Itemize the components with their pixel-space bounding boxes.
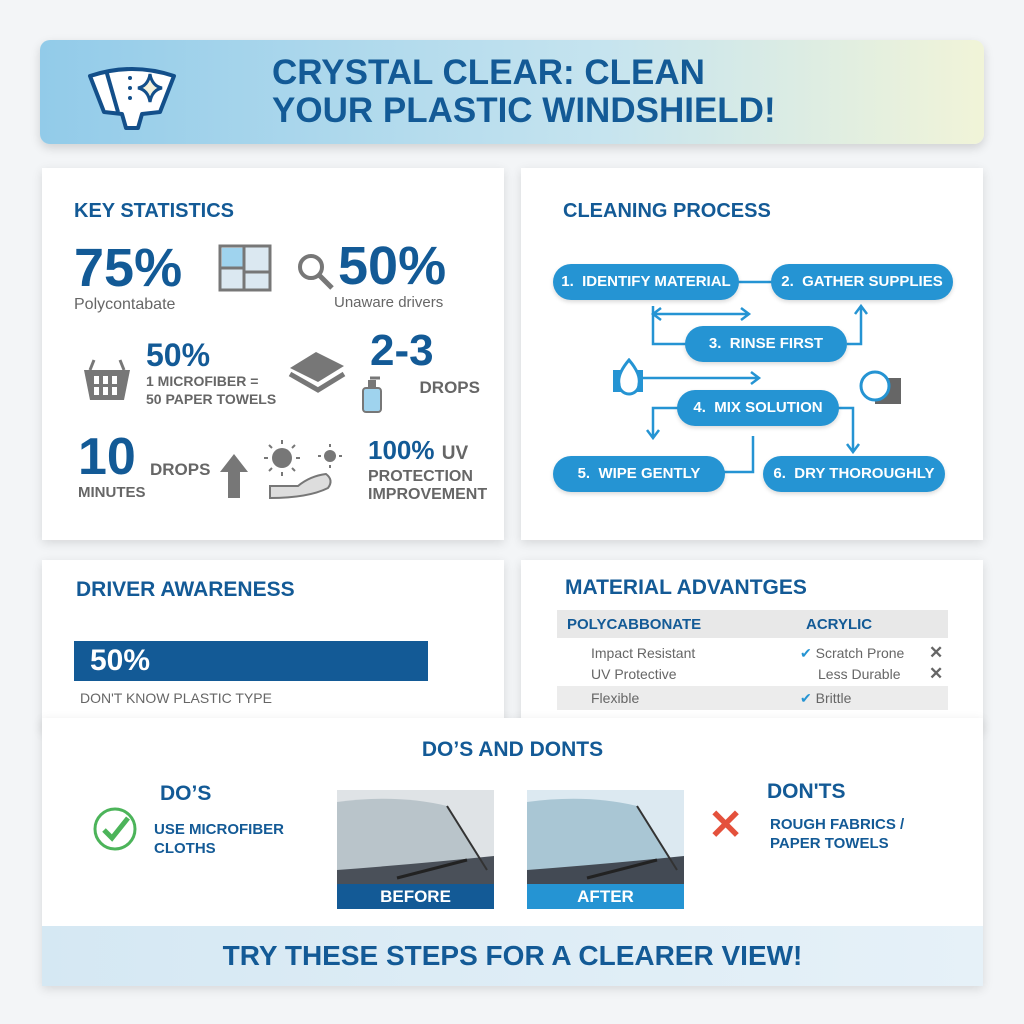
heading: CLEANING PROCESS [563,200,771,222]
table: POLYCABBONATE [567,616,701,633]
panel: driver awareness [42,560,504,730]
stat 100% UV: IMPROVEMENT [368,486,487,503]
table: ✔ Brittle [800,690,851,706]
step 5 [553,456,725,492]
icon: windshield [88,67,176,130]
panel: key statistics: DROPS [150,460,210,479]
stat 50% unaware: 50% [338,236,446,296]
stat 50% microfiber: 50 PAPER TOWELS [146,391,276,407]
stat 50% unaware: Unaware drivers [334,294,443,311]
table: Less Durable [818,666,900,682]
footer banner: TRY THESE STEPS FOR A CLEARER VIEW! [223,940,802,971]
table: Impact Resistant [591,645,695,661]
icon: window [218,244,272,292]
stat 10 minutes: MINUTES [78,484,146,501]
step 2: 2. GATHER SUPPLIES [781,273,943,290]
icon: up arrow [220,454,248,498]
title: YOUR PLASTIC WINDSHIELD! [272,91,776,130]
stat 2-3 drops: DROPS [420,378,480,397]
icon: magnifier [298,254,334,290]
panel: key statistics [42,168,504,540]
stat 50% microfiber: 50% [146,337,210,373]
after image [527,790,684,909]
icon: towels [288,352,346,393]
step 6 [763,456,945,492]
stat 2-3 drops: 2-3 [370,326,434,375]
heading: KEY STATISTICS [74,200,234,222]
header banner [40,40,984,144]
table: ACRYLIC [806,616,872,633]
do's heading: DO’S [160,782,211,805]
step 2 [771,264,953,300]
do's text: CLOTHS [154,840,216,857]
heading: MATERIAL ADVANTGES [565,576,807,599]
stat 10 minutes [78,428,146,501]
stat 100% UV: 100% UV [368,435,468,465]
before image [337,790,494,909]
don'ts text: PAPER TOWELS [770,835,889,852]
bar [74,641,428,681]
panel: material advantages [521,560,983,730]
title: CRYSTAL CLEAR: CLEAN [272,53,705,92]
table [557,610,948,710]
table: ✕ [929,643,943,662]
panel: do's and don'ts [42,718,983,986]
step 3: 3. RINSE FIRST [709,335,823,352]
step 1 [553,264,739,300]
don'ts text [770,816,904,852]
step 5: 5. WIPE GENTLY [578,465,700,482]
do's text: USE MICROFIBER [154,821,284,838]
icon: bottle [362,376,382,413]
bar: 50% [90,644,150,677]
step 4 [677,390,839,426]
do's text [154,821,284,857]
icon: refresh [860,370,901,404]
step 6: 6. DRY THOROUGHLY [773,465,935,482]
stat 50% microfiber: 1 MICROFIBER = [146,373,258,389]
table: ✔ Scratch Prone [800,645,904,661]
stat 10 minutes: 10 [78,428,136,486]
before image: BEFORE [380,887,451,906]
table: UV Protective [591,666,677,682]
step 3 [685,326,847,362]
heading: DRIVER AWARENESS [76,578,295,601]
icon: sun and windshield [264,440,342,499]
after image: AFTER [577,887,634,906]
caption: DON'T KNOW PLASTIC TYPE [80,690,272,706]
don'ts text: ROUGH FABRICS / [770,816,904,833]
stat 100% UV [368,435,487,503]
stat 100% UV: PROTECTION [368,468,473,485]
icon: cross: ✕ [708,801,743,848]
panel: cleaning process [521,168,983,540]
flow arrows [643,280,868,474]
stat 75%: Polycontabate [74,296,175,313]
footer banner [42,926,983,986]
stat 2-3 drops [370,326,480,397]
don'ts heading: DON'TS [767,780,846,803]
icon: check [94,808,136,850]
table: Flexible [591,690,639,706]
heading: DO’S AND DONTS [422,738,603,761]
icon: basket [84,360,130,400]
title [272,53,776,130]
table: ✕ [929,664,943,683]
icon: water drop [613,358,643,396]
step 1: 1. IDENTIFY MATERIAL [561,273,731,290]
step 4: 4. MIX SOLUTION [693,399,823,416]
stat 75%: 75% [74,238,182,298]
stat 50% microfiber [146,337,276,407]
